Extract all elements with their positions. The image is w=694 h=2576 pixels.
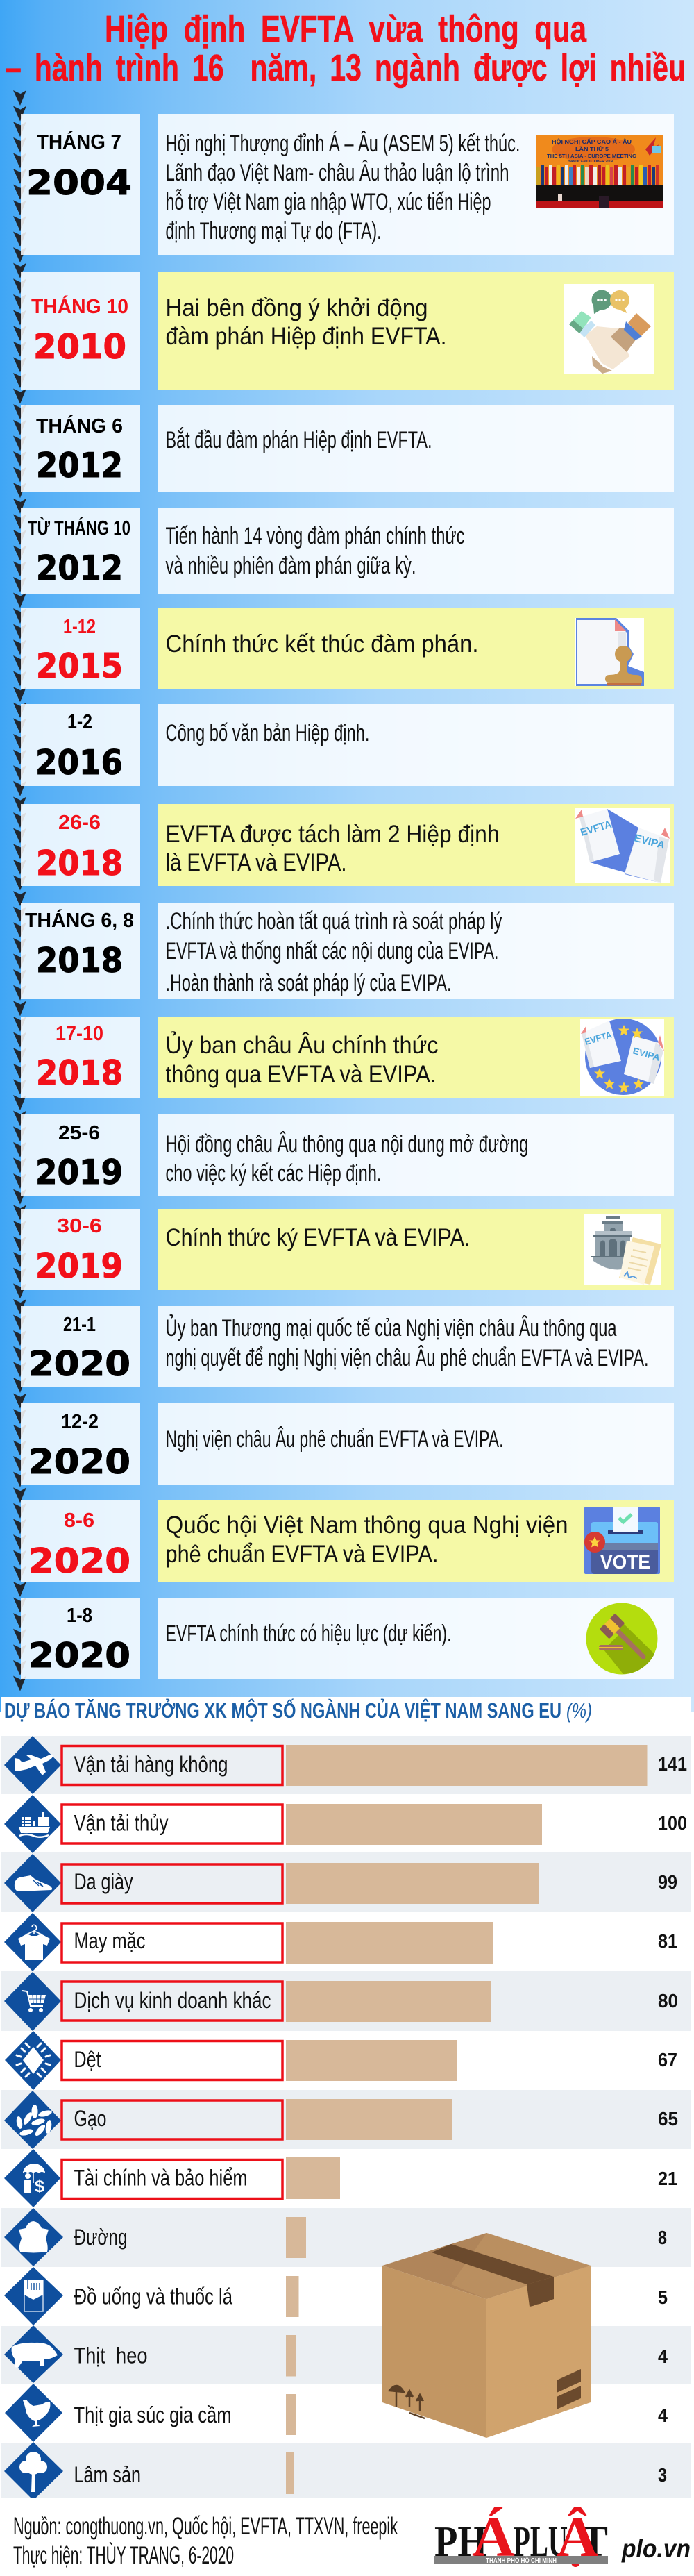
bar row: Thịt gia súc gia cầm (5, 2384, 668, 2442)
bar row: May mặc: 81 (658, 1930, 677, 1952)
bar row: Thịt heo (4, 2325, 668, 2383)
row: 12-2 2020 (21, 1403, 674, 1485)
row: tháng 7 2004: Lãnh đạo Việt Nam- châu Âu thảo luận lộ trình (165, 160, 509, 186)
row: tháng 7 2004: 2004 (26, 163, 132, 203)
row: 17-10 2018: 2018 (36, 1053, 123, 1093)
row: tháng 6, 8 2018: THÁNG 6, 8 (25, 908, 134, 932)
row: tháng 6, 8 2018: 2018 (36, 941, 123, 980)
row: tháng 7 2004: hỗ trợ Việt Nam gia nhập WTO, xúc tiến Hiệp (165, 189, 491, 215)
row: 25-6 2019: 25-6 (58, 1122, 100, 1144)
row: tháng 6, 8 2018 (21, 903, 674, 999)
bar row: Gạo (4, 2091, 678, 2149)
row: 8-6 2020: 8-6 (64, 1509, 94, 1532)
row: tháng 6 2012: Bắt đầu đàm phán Hiệp định EVFTA. (165, 427, 432, 453)
row: tháng 6, 8 2018: .Hoàn thành rà soát pháp lý của EVIPA. (165, 970, 451, 996)
bar row: Đồ uống và thuốc lá: Đồ uống và thuốc lá (74, 2284, 232, 2309)
row: tháng 6 2012: 2012 (36, 446, 123, 485)
image: ASEM 5 summit photo: THE 5TH ASIA - EUROPE MEETING (547, 153, 636, 159)
panel: sector export growth forecast (0, 1697, 694, 2576)
row: 8-6 2020: 2020 (28, 1541, 130, 1581)
bar row: Dệt: 67 (658, 2049, 677, 2071)
row: 17-10 2018: Ủy ban châu Âu chính thức (165, 1031, 439, 1059)
row: tháng 10 2010: Hai bên đồng ý khởi động (165, 294, 428, 321)
row: 8-6 2020 (21, 1500, 674, 1582)
logo: Pháp Luật: Á (472, 2505, 515, 2568)
icon: vote box: VOTE (600, 1551, 650, 1573)
bar row: Thịt gia súc gia cầm: 4 (658, 2404, 668, 2426)
chart heading: (%) (566, 1698, 592, 1723)
bar row: Vận tải hàng không: 141 (658, 1753, 687, 1775)
icon: EU stars and agreements: EVIPA (632, 1045, 661, 1063)
row: 26-6 2018 (21, 804, 674, 886)
row: 25-6 2019 (21, 1114, 674, 1196)
row: 12-2 2020: Nghị viện châu Âu phê chuẩn EVFTA và EVIPA. (165, 1426, 504, 1453)
row: từ tháng 10 2012 (21, 508, 674, 594)
row: 12-2 2020: 2020 (28, 1442, 130, 1482)
logo: Pháp Luật (434, 2505, 608, 2568)
row: từ tháng 10 2012: Tiến hành 14 vòng đàm phán chính thức (165, 523, 465, 549)
row: 1-12 2015 (21, 608, 674, 689)
image: ASEM 5 summit photo (536, 135, 663, 208)
bar row: Thịt gia súc gia cầm: Thịt gia súc gia cầm (74, 2402, 232, 2427)
source credits: Nguồn: congthuong.vn, Quốc hội, EVFTA, TTXVN, freepik (13, 2513, 398, 2540)
row: 21-1 2020 (21, 1306, 674, 1387)
icon: two agreements: EVIPA (633, 832, 666, 852)
icon: EU stars and agreements: EVFTA (584, 1029, 613, 1047)
bar row: Đồ uống và thuốc lá: 5 (658, 2286, 668, 2308)
row: 1-8 2020: 2020 (28, 1636, 130, 1675)
row: tháng 6, 8 2018: EVFTA và thống nhất các nội dung của EVIPA. (165, 938, 498, 964)
row: 17-10 2018: 17-10 (56, 1023, 103, 1045)
bar row: Đường (4, 2208, 667, 2266)
row: tháng 7 2004 (21, 114, 674, 255)
bar row: Da giày (4, 1854, 677, 1912)
bar row: Vận tải thủy: Vận tải thủy (74, 1811, 168, 1836)
icon: vote box (584, 1507, 660, 1574)
image: ASEM 5 summit photo: HANOI 7-9 OCTOBER 2004 (568, 160, 613, 164)
logo: Pháp Luật: PLU (514, 2518, 568, 2566)
row: tháng 7 2004: định Thương mại Tự do (FTA). (165, 218, 382, 244)
row: tháng 6, 8 2018: .Chính thức hoàn tất quá trình rà soát pháp lý (165, 908, 502, 935)
source credits: Thực hiện: THÙY TRANG, 6-2020 (13, 2542, 234, 2569)
row: 12-2 2020: 12-2 (61, 1411, 99, 1433)
row: 21-1 2020: 2020 (28, 1344, 130, 1384)
bar row: Dịch vụ kinh doanh khác: 80 (658, 1990, 678, 2012)
row: 17-10 2018 (21, 1017, 674, 1098)
row: 26-6 2018: 2018 (36, 844, 123, 883)
bar row: Dịch vụ kinh doanh khác: Dịch vụ kinh doanh khác (74, 1988, 271, 2013)
row: 1-2 2016: Công bố văn bản Hiệp định. (165, 720, 369, 746)
bar row: May mặc (4, 1913, 677, 1971)
bar row: Đường: 8 (658, 2227, 667, 2248)
row: 1-12 2015: 2015 (36, 646, 123, 686)
row: tháng 7 2004: THÁNG 7 (37, 130, 121, 153)
row: tháng 10 2010 (21, 272, 674, 390)
logo: Pháp Luật: THÀNH PHỐ HỒ CHÍ MINH (486, 2555, 557, 2565)
bar row: Dịch vụ kinh doanh khác (4, 1972, 678, 2031)
logo: Pháp Luật: PH (434, 2518, 487, 2566)
logo: Pháp Luật: Ậ (557, 2505, 598, 2568)
bar row: Đồ uống và thuốc lá (4, 2267, 668, 2325)
row: 1-8 2020 (21, 1598, 674, 1679)
row: từ tháng 10 2012: 2012 (36, 549, 123, 588)
bar row: Lâm sản (4, 2442, 667, 2498)
row: 30-6 2019: 30-6 (57, 1215, 102, 1237)
row: 30-6 2019: 2019 (35, 1246, 123, 1286)
bar row: Lâm sản: 3 (658, 2464, 667, 2486)
row: 25-6 2019: 2019 (35, 1153, 123, 1192)
source credits (13, 2513, 398, 2569)
row: tháng 10 2010: đàm phán Hiệp định EVFTA. (165, 323, 447, 350)
icon: two agreements (575, 808, 670, 883)
image: ASEM 5 summit photo: HỘI NGHỊ CẤP CAO Á - ÂU (552, 138, 632, 145)
bar row: Vận tải thủy (4, 1795, 687, 1853)
bar row: Thịt heo: Thịt heo (74, 2343, 147, 2368)
logo: Pháp Luật: T (580, 2518, 608, 2566)
row: 1-8 2020: EVFTA chính thức có hiệu lực (dự kiến). (165, 1621, 451, 1647)
bar row: Da giày: Da giày (74, 1869, 133, 1894)
background (0, 0, 694, 1712)
icon: handshake (564, 284, 654, 374)
row: 1-2 2016: 1-2 (67, 711, 92, 733)
row: 8-6 2020: Quốc hội Việt Nam thông qua Nghị viện (165, 1512, 568, 1539)
row: 21-1 2020: 21-1 (63, 1314, 96, 1336)
row: 30-6 2019 (21, 1209, 674, 1290)
row: 30-6 2019: Chính thức ký EVFTA và EVIPA. (165, 1224, 471, 1251)
image: ASEM 5 summit photo: LẦN THỨ 5 (575, 145, 609, 152)
row: 25-6 2019: Hội đồng châu Âu thông qua nội dung mở đường (165, 1131, 529, 1157)
row: 1-12 2015: Chính thức kết thúc đàm phán. (165, 630, 479, 658)
bar row: Gạo: 65 (658, 2108, 678, 2130)
row: 1-2 2016: 2016 (35, 743, 123, 783)
row: 1-2 2016 (21, 704, 674, 786)
row: tháng 6 2012: THÁNG 6 (36, 414, 123, 437)
icon: two agreements: EVFTA (579, 819, 613, 839)
row: 1-8 2020: 1-8 (67, 1605, 92, 1627)
bar row: Tài chính và bảo hiểm: 21 (658, 2168, 677, 2189)
bar row: Gạo: Gạo (74, 2106, 107, 2131)
bar row: Da giày: 99 (658, 1871, 677, 1893)
row: 26-6 2018: EVFTA được tách làm 2 Hiệp định (165, 821, 500, 848)
icon: gavel (586, 1603, 658, 1675)
row: từ tháng 10 2012: TỪ THÁNG 10 (28, 516, 130, 540)
row: 26-6 2018: là EVFTA và EVIPA. (165, 849, 347, 876)
row: tháng 10 2010: THÁNG 10 (31, 294, 128, 318)
bar row: Đường: Đường (74, 2225, 128, 2250)
icon: document and stamp (575, 618, 644, 686)
bar row: Tài chính và bảo hiểm: Tài chính và bảo hiểm (74, 2165, 247, 2190)
bar row: Vận tải hàng không (4, 1736, 687, 1794)
illustration: cardboard box (382, 2233, 591, 2438)
bar row: Tài chính và bảo hiểm (4, 2149, 677, 2207)
bar row: Thịt heo: 4 (658, 2345, 668, 2367)
title (6, 8, 686, 89)
bar row: Dệt: Dệt (74, 2047, 101, 2072)
row: từ tháng 10 2012: và nhiều phiên đàm phán giữa kỳ. (165, 553, 416, 579)
bar row: Vận tải hàng không: Vận tải hàng không (74, 1752, 228, 1777)
bar row: Tài chính và bảo hiểm: $ (35, 2177, 44, 2196)
icon: EU stars and agreements (580, 1019, 664, 1096)
row: tháng 6 2012 (21, 405, 674, 492)
row: 1-12 2015: 1-12 (63, 616, 96, 638)
icon: building and signed document (584, 1214, 661, 1285)
timeline arrows (10, 90, 31, 1691)
row: tháng 10 2010: 2010 (33, 327, 126, 367)
row: 26-6 2018: 26-6 (58, 812, 101, 834)
row: 17-10 2018: thông qua EVFTA và EVIPA. (165, 1061, 436, 1088)
row: 25-6 2019: cho việc ký kết các Hiệp định. (165, 1160, 382, 1187)
bar row: Vận tải thủy: 100 (658, 1812, 687, 1834)
row: 8-6 2020: phê chuẩn EVFTA và EVIPA. (165, 1541, 439, 1568)
bar row: May mặc: May mặc (74, 1928, 146, 1953)
bar row: Lâm sản: Lâm sản (74, 2462, 141, 2487)
row: tháng 7 2004: Hội nghị Thượng đỉnh Á – Âu (ASEM 5) kết thúc. (165, 131, 520, 157)
bar row: Dệt (5, 2031, 677, 2090)
